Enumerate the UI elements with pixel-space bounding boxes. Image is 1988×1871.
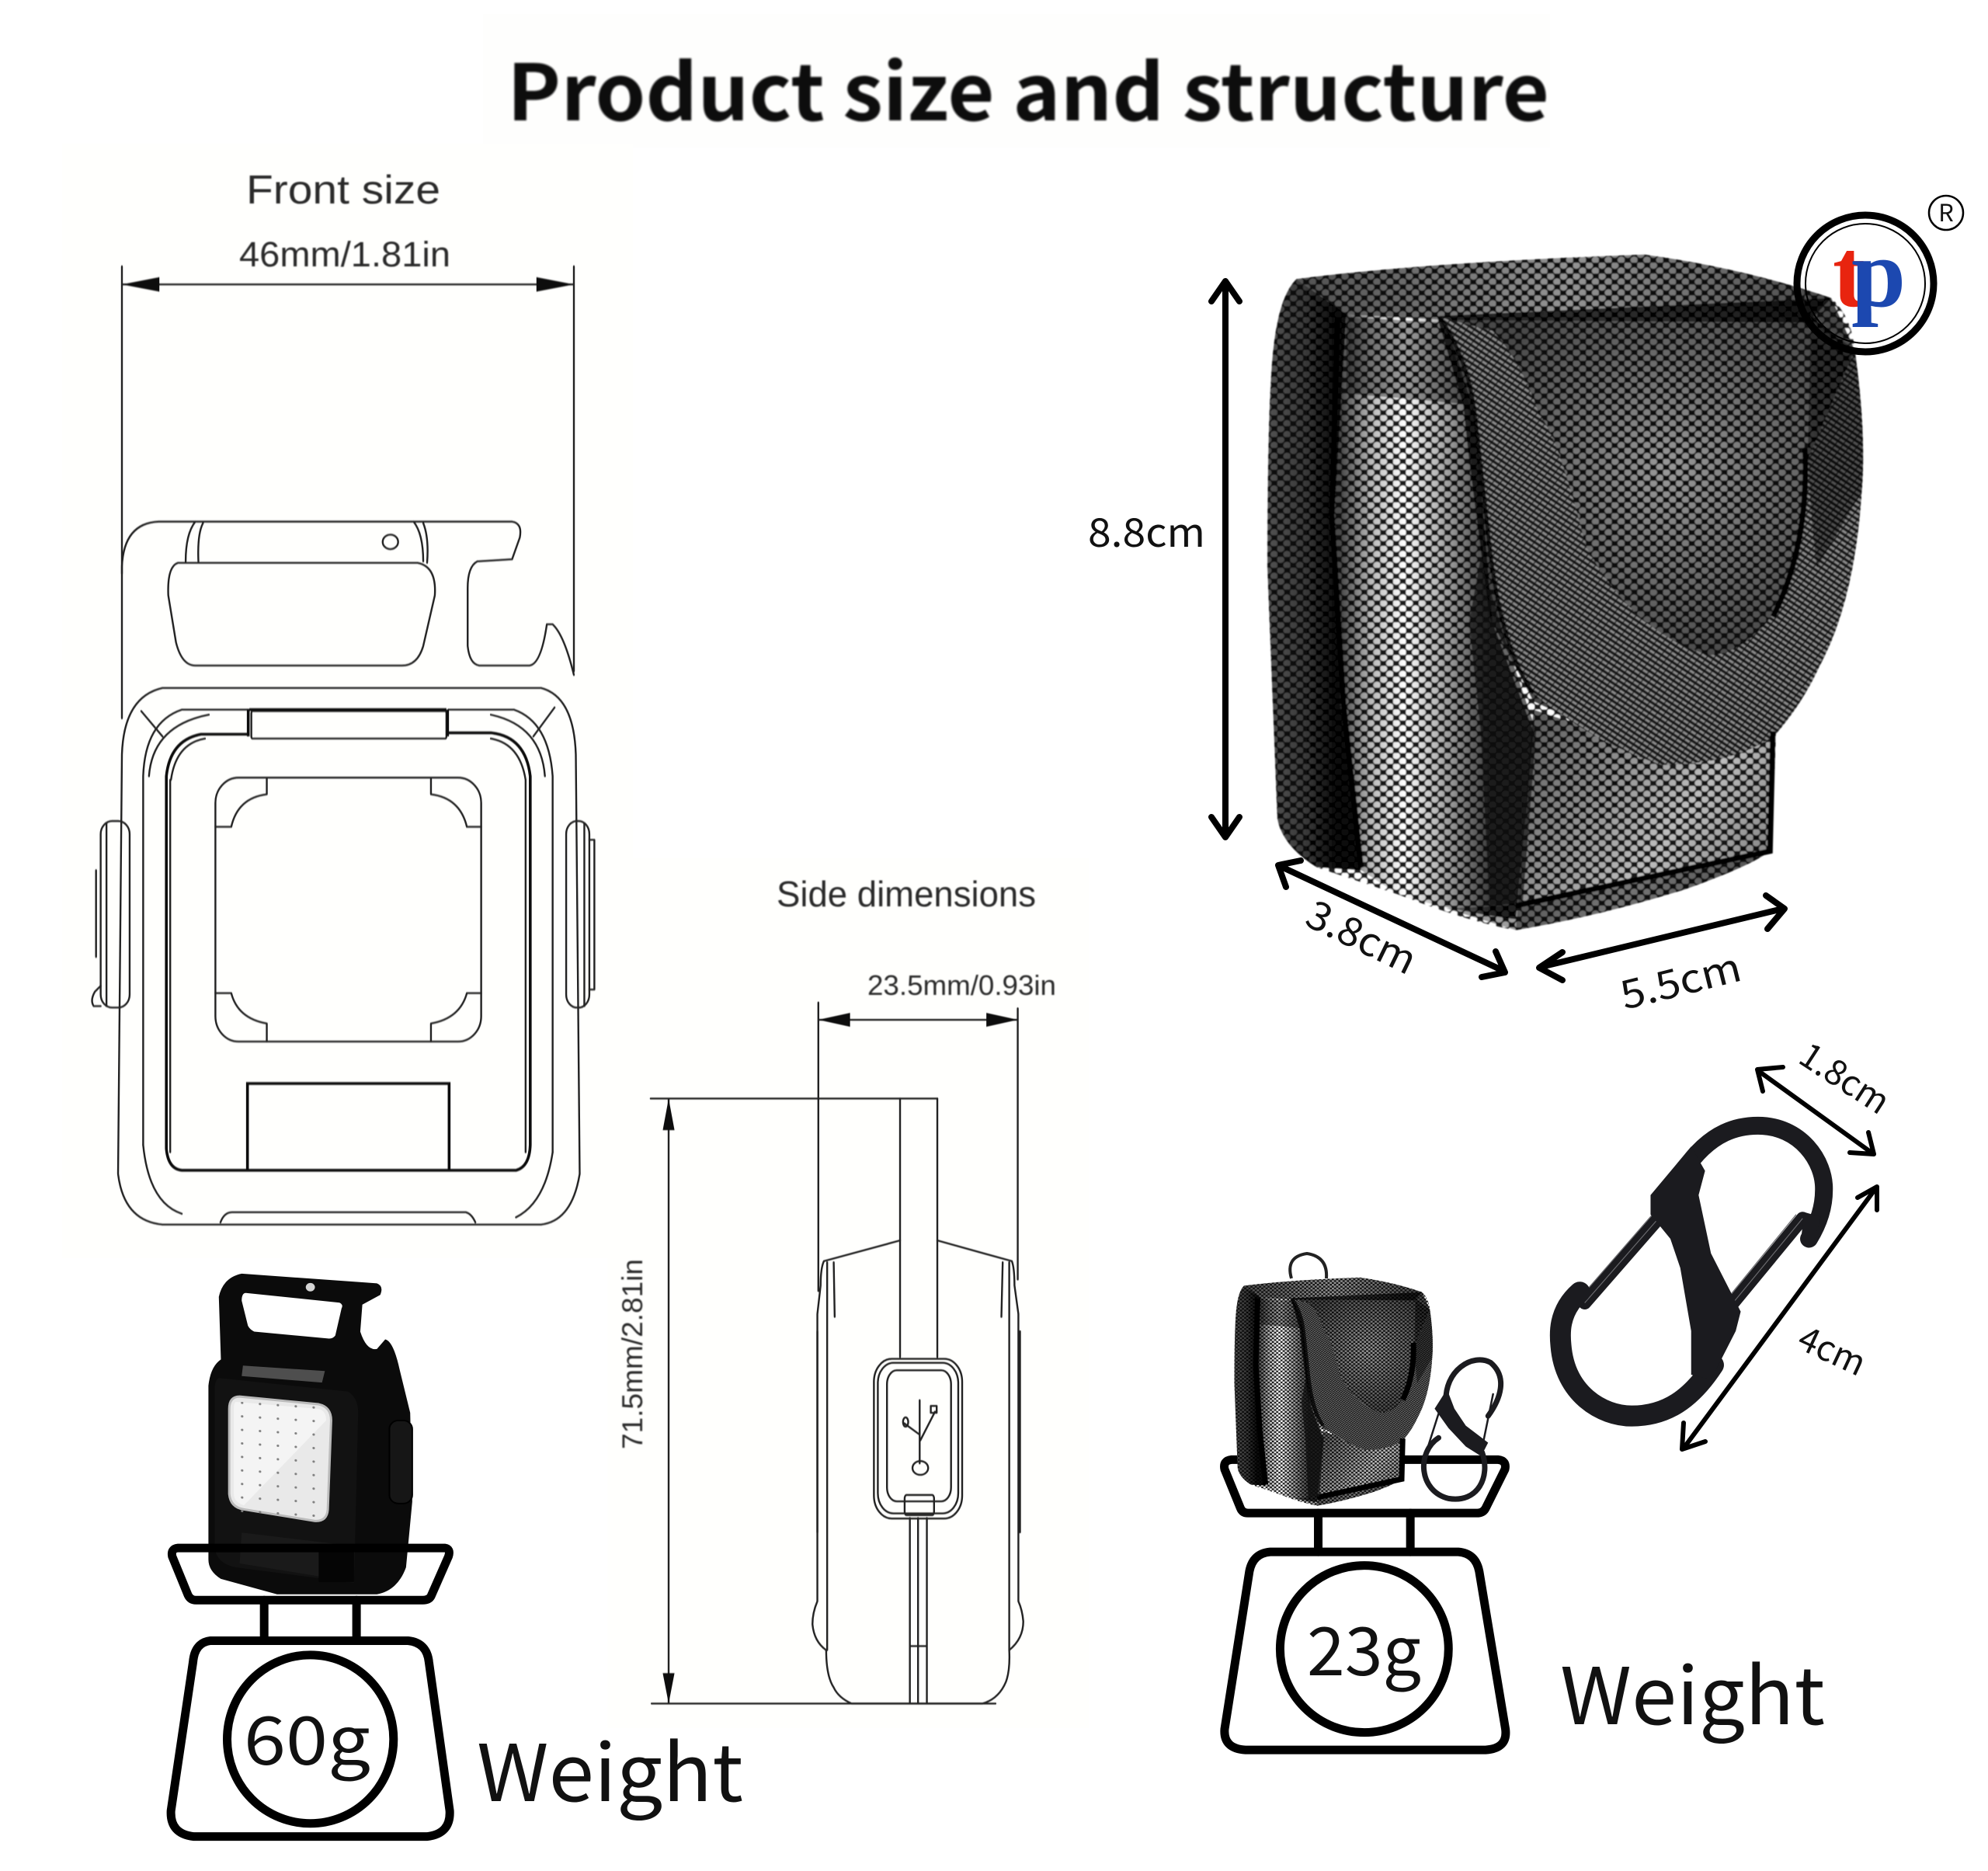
label: carabiner length: 4cm bbox=[1792, 1311, 1875, 1386]
width dimension arrow bbox=[122, 266, 574, 671]
LED panel outline bbox=[215, 777, 481, 1042]
label: pouch height: 8.8cm bbox=[1088, 501, 1205, 558]
lamp body bbox=[208, 1274, 412, 1595]
ring on small pouch bbox=[1290, 1254, 1326, 1278]
carabiner gate ribs bbox=[1580, 1208, 1802, 1312]
lamp top tab bbox=[242, 1365, 325, 1382]
side button bbox=[389, 1421, 412, 1504]
lamp photo bbox=[208, 1274, 412, 1595]
label: pouch depth: 3.8cm bbox=[1298, 883, 1428, 986]
logo: tp registered mark bbox=[1797, 193, 1963, 352]
panel: lamp on scale bbox=[171, 1274, 743, 1837]
small carabiner bbox=[1423, 1360, 1501, 1499]
heading: front size: Front size bbox=[246, 168, 440, 213]
body side outline bbox=[812, 1240, 1024, 1703]
pouch centre dark band bbox=[1469, 557, 1536, 906]
logo: tp registered mark: R bbox=[1938, 193, 1954, 228]
height arrow bbox=[1211, 281, 1239, 837]
width arrow bbox=[1539, 896, 1785, 980]
lower centre rail bbox=[910, 1518, 927, 1703]
logo backing disc bbox=[1797, 215, 1934, 352]
lamp body outline bbox=[118, 688, 579, 1225]
dimension label: height: 71.5mm/2.81in bbox=[617, 1259, 648, 1449]
weight label: Weight bbox=[1560, 1634, 1825, 1748]
hook and bottle opener outline bbox=[122, 522, 574, 718]
pouch lower right panel bbox=[1516, 709, 1776, 930]
panel: carabiner with dimensions bbox=[1560, 1028, 1901, 1449]
panel: pouch and carabiner on scale bbox=[1225, 1254, 1825, 1750]
carabiner gates bbox=[1585, 1212, 1802, 1312]
large carabiner bbox=[1560, 1125, 1824, 1416]
scale reading: 60g: 60g bbox=[244, 1687, 370, 1784]
heading: side dimensions: Side dimensions bbox=[777, 874, 1036, 914]
logo: tp registered mark: p bbox=[1851, 220, 1906, 328]
carabiner top loop bbox=[1684, 1125, 1824, 1239]
pouch photo bbox=[1267, 255, 1863, 930]
weight label: Weight bbox=[477, 1711, 743, 1824]
arrow: carabiner width bbox=[1757, 1067, 1874, 1154]
panel: front size drawing bbox=[62, 144, 633, 1258]
dimension label: side width: 23.5mm/0.93in bbox=[867, 969, 1056, 1001]
dimension label: front width: 46mm/1.81in bbox=[239, 235, 450, 274]
side width arrow bbox=[818, 1003, 1018, 1291]
pouch pocket top bbox=[1347, 317, 1469, 405]
scale reading: 23g: 23g bbox=[1307, 1598, 1421, 1695]
panel: pouch with dimensions bbox=[1088, 255, 1863, 1021]
panel: side dimensions drawing bbox=[607, 858, 1089, 1728]
pouch bottom rim bbox=[1446, 848, 1772, 930]
bottom kickstand bbox=[248, 1083, 449, 1170]
small pouch bbox=[1234, 1278, 1433, 1506]
pouch flap edge shadow bbox=[1440, 317, 1534, 693]
label: pouch width: 5.5cm bbox=[1614, 936, 1746, 1021]
title background band bbox=[483, 14, 1550, 148]
carabiner bottom loop bbox=[1560, 1292, 1713, 1416]
pouch left side dark bbox=[1267, 279, 1361, 870]
carabiner centre body bbox=[1650, 1146, 1741, 1379]
logo: tp registered mark: t bbox=[1833, 220, 1865, 328]
hook pin bbox=[306, 1283, 315, 1292]
pouch seams bbox=[1332, 317, 1806, 906]
arrow: carabiner length bbox=[1682, 1187, 1877, 1449]
height arrow bbox=[651, 1098, 996, 1703]
side buttons bbox=[92, 821, 594, 1007]
depth arrow bbox=[1278, 861, 1505, 977]
pouch front-left panel bbox=[1335, 315, 1534, 920]
scale icon bbox=[171, 1548, 450, 1837]
pouch flap bbox=[1437, 298, 1854, 764]
USB port bbox=[874, 1359, 962, 1518]
title: Product size and structure bbox=[507, 30, 1549, 143]
lamp cover bbox=[214, 1378, 358, 1583]
scale pan and base bbox=[1225, 1459, 1506, 1750]
pouch top bbox=[1297, 255, 1831, 322]
side view line drawing bbox=[651, 1003, 1024, 1703]
pouch right strap shadow bbox=[1808, 317, 1863, 568]
carabiner top hook end bbox=[1801, 1212, 1821, 1246]
hook profile bbox=[900, 1098, 937, 1357]
LED panel bbox=[229, 1396, 331, 1521]
lamp kickstand bbox=[240, 1532, 354, 1582]
pouch flap band bbox=[1440, 317, 1863, 765]
pouch body bbox=[1267, 255, 1863, 930]
label: carabiner width: 1.8cm bbox=[1791, 1028, 1901, 1124]
front view line drawing bbox=[92, 266, 594, 1225]
